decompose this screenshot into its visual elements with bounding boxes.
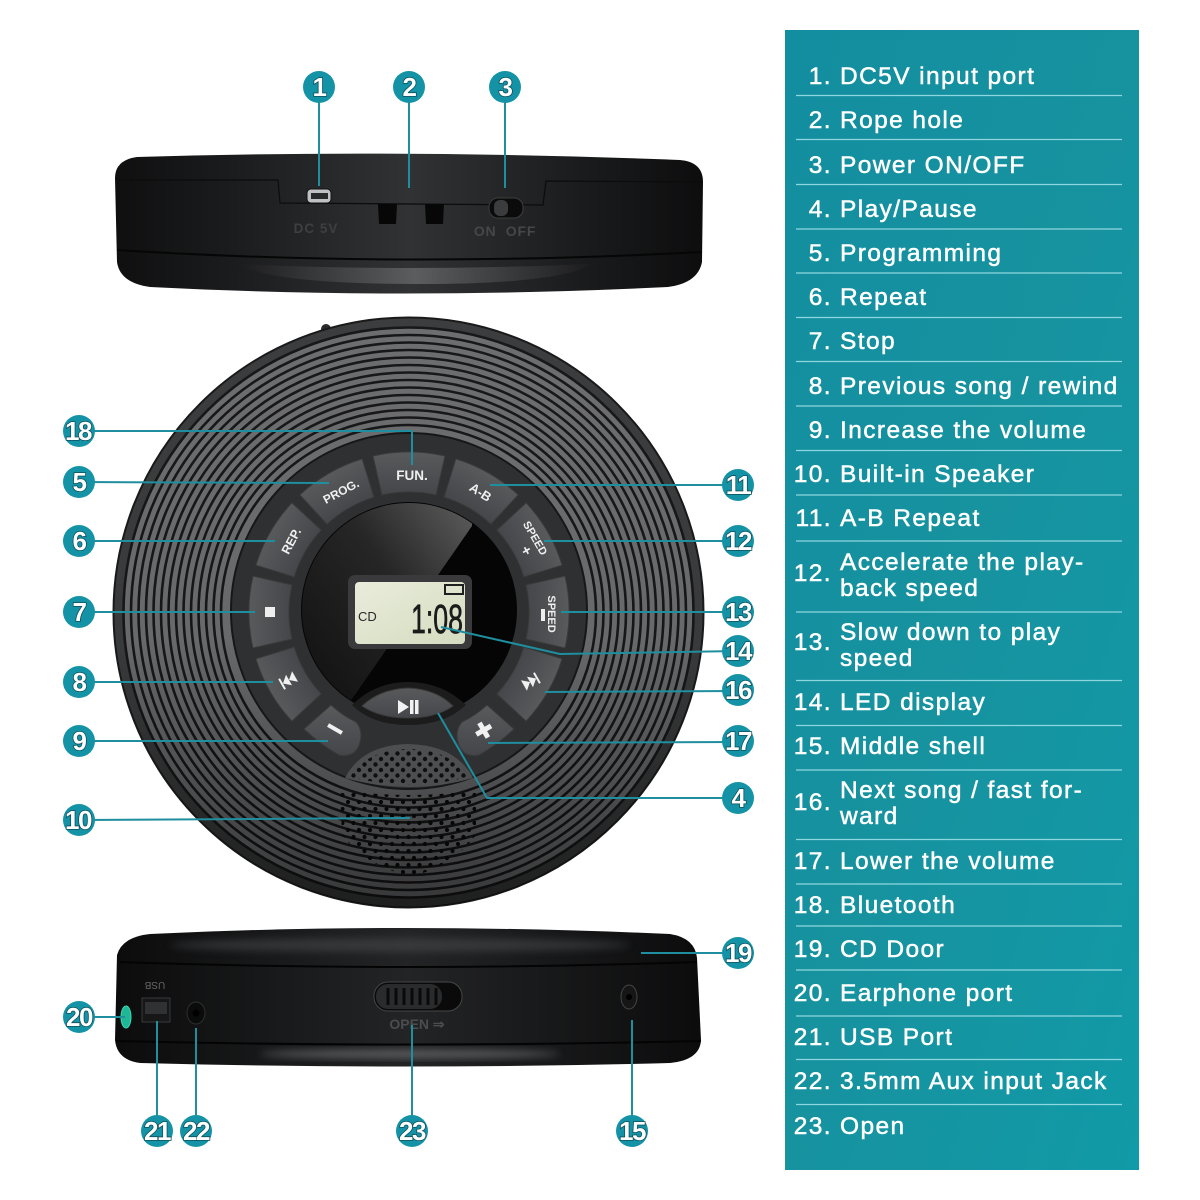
callout 20 bbox=[63, 1001, 125, 1033]
button: REP.: REP. bbox=[279, 526, 304, 557]
callout 18: 18 bbox=[65, 416, 92, 446]
legend item 23: 23. bbox=[794, 1113, 832, 1140]
legend item 14: LED display bbox=[840, 689, 986, 716]
icon: open slider bbox=[374, 982, 462, 1011]
label: ON OFF: ON OFF bbox=[474, 223, 536, 239]
icon: USB port bbox=[142, 979, 170, 1022]
icon: middle shell screw bbox=[621, 985, 637, 1009]
legend item 9: 9. bbox=[809, 417, 832, 444]
button: SPEED - bbox=[526, 576, 569, 648]
legend item 7 bbox=[809, 328, 896, 355]
legend item 13: speed bbox=[840, 645, 914, 672]
callout 18 bbox=[63, 415, 412, 465]
button: FUN.: FUN. bbox=[396, 468, 428, 483]
panel: parts legend bbox=[785, 30, 1139, 1170]
icon: earphone light bbox=[121, 1006, 131, 1028]
speaker grille upper bbox=[345, 744, 473, 787]
disc glare bbox=[302, 503, 472, 700]
button: A-B: A-B bbox=[467, 480, 494, 505]
callout 15 bbox=[616, 1020, 648, 1147]
legend item 23: Open bbox=[840, 1113, 906, 1140]
legend item 11: 11. bbox=[796, 505, 832, 532]
callout 1: 1 bbox=[313, 72, 327, 102]
legend item 7: Stop bbox=[840, 328, 896, 355]
button: play pause bbox=[352, 682, 466, 725]
legend item 4: 4. bbox=[809, 196, 832, 223]
legend item 16 bbox=[794, 777, 1083, 830]
legend item 14: 14. bbox=[794, 689, 832, 716]
button: REP. bbox=[252, 501, 326, 585]
legend item 3: 3. bbox=[809, 152, 832, 179]
legend item 5: 5. bbox=[809, 240, 832, 267]
callout 22: 22 bbox=[183, 1116, 210, 1146]
legend item 12: Accelerate the play- bbox=[840, 549, 1085, 576]
button: previous bbox=[252, 639, 326, 723]
callout 17 bbox=[488, 725, 754, 757]
callout 5 bbox=[63, 466, 329, 498]
callout 5: 5 bbox=[73, 467, 87, 497]
LCD display: CD bbox=[358, 609, 377, 624]
callout 16: 16 bbox=[725, 675, 752, 705]
LCD display bbox=[348, 575, 472, 649]
button: SPEED + bbox=[492, 501, 566, 585]
legend item 8: 8. bbox=[809, 373, 832, 400]
legend item 6: Repeat bbox=[840, 284, 927, 311]
callout 2 bbox=[393, 71, 425, 188]
legend item 12 bbox=[794, 549, 1085, 602]
control ring bbox=[231, 433, 587, 789]
legend item 20: 20. bbox=[794, 980, 832, 1007]
legend item 18: Bluetooth bbox=[840, 892, 956, 919]
button: FUN. bbox=[373, 452, 445, 495]
legend item 1: DC5V input port bbox=[840, 63, 1035, 90]
legend item 19: 19. bbox=[794, 936, 832, 963]
callout 22 bbox=[180, 1028, 212, 1147]
legend item 5: Programming bbox=[840, 240, 1002, 267]
callout 8 bbox=[63, 666, 273, 698]
callout 6 bbox=[63, 525, 275, 557]
button: SPEED -: SPEED bbox=[545, 595, 557, 633]
device: front side view bbox=[115, 928, 701, 1066]
concentric grooves bbox=[124, 328, 694, 898]
callout 19: 19 bbox=[725, 938, 752, 968]
icon: rope holes bbox=[378, 204, 444, 224]
speaker grille lower bbox=[340, 790, 476, 876]
callout 2: 2 bbox=[403, 72, 417, 102]
device: rear side view bbox=[115, 154, 703, 294]
button: stop bbox=[249, 576, 292, 648]
button: A-B bbox=[436, 455, 520, 529]
callout 12 bbox=[544, 525, 754, 557]
callout 7 bbox=[63, 596, 255, 628]
icon: power switch bbox=[489, 198, 523, 218]
legend item 13 bbox=[794, 619, 1061, 672]
callout 13: 13 bbox=[725, 597, 752, 627]
callout 14 bbox=[441, 627, 754, 667]
legend item 9: Increase the volume bbox=[840, 417, 1087, 444]
callout 21 bbox=[141, 1021, 173, 1147]
callout 23 bbox=[396, 1025, 428, 1147]
legend item 13: Slow down to play bbox=[840, 619, 1061, 646]
legend item 1: 1. bbox=[809, 63, 832, 90]
legend item 16: 16. bbox=[794, 789, 832, 816]
button: SPEED +: + bbox=[516, 543, 536, 559]
legend item 13: 13. bbox=[794, 629, 832, 656]
legend item 17: Lower the volume bbox=[840, 848, 1056, 875]
black display disc bbox=[301, 502, 517, 718]
legend item 2: Rope hole bbox=[840, 107, 964, 134]
legend item 16: Next song / fast for- bbox=[840, 777, 1083, 804]
icon: aux jack bbox=[187, 1002, 205, 1024]
label: DC 5V: DC 5V bbox=[294, 221, 338, 236]
callout 13 bbox=[561, 596, 754, 628]
callout 10: 10 bbox=[65, 805, 92, 835]
callout 14: 14 bbox=[725, 636, 753, 666]
callout 9: 9 bbox=[73, 726, 87, 756]
callout 9 bbox=[63, 725, 328, 757]
legend item 22: 22. bbox=[794, 1068, 832, 1095]
legend item 10: Built-in Speaker bbox=[840, 461, 1035, 488]
button: volume plus bbox=[457, 705, 514, 755]
callout 20: 20 bbox=[66, 1002, 93, 1032]
callout 3: 3 bbox=[499, 72, 513, 102]
button: PROG. bbox=[298, 455, 382, 529]
callout 12: 12 bbox=[725, 526, 752, 556]
legend item 23 bbox=[794, 1113, 906, 1140]
legend item 2: 2. bbox=[809, 107, 832, 134]
callout 1 bbox=[303, 71, 335, 186]
legend item 11: A-B Repeat bbox=[840, 505, 981, 532]
legend item 10: 10. bbox=[794, 461, 832, 488]
legend item 8: Previous song / rewind bbox=[840, 373, 1119, 400]
legend item 12: back speed bbox=[840, 575, 979, 602]
button: PROG.: PROG. bbox=[321, 476, 361, 507]
icon: micro USB port bbox=[307, 189, 331, 203]
button: next bbox=[492, 639, 566, 723]
callout 10 bbox=[63, 804, 410, 836]
legend item 19 bbox=[794, 936, 945, 963]
legend item 12: 12. bbox=[794, 560, 832, 587]
callout 8: 8 bbox=[73, 667, 87, 697]
legend item 19: CD Door bbox=[840, 936, 945, 963]
legend item 7: 7. bbox=[809, 328, 832, 355]
label: OPEN: OPEN ⇒ bbox=[389, 1016, 445, 1032]
legend item 18: 18. bbox=[794, 892, 832, 919]
callout 19 bbox=[641, 937, 754, 969]
callout 6: 6 bbox=[73, 526, 87, 556]
LCD display: 1:08 bbox=[411, 596, 463, 642]
legend item 17: 17. bbox=[794, 848, 832, 875]
legend item 20: Earphone port bbox=[840, 980, 1013, 1007]
legend item 22: 3.5mm Aux input Jack bbox=[840, 1068, 1108, 1095]
callout 4 bbox=[438, 713, 754, 814]
button: SPEED +: SPEED bbox=[520, 519, 549, 558]
legend item 16: ward bbox=[839, 803, 899, 830]
legend item 21: USB Port bbox=[840, 1024, 953, 1051]
device: top view disc bbox=[114, 318, 704, 908]
callout 11 bbox=[490, 469, 754, 501]
legend item 15: 15. bbox=[794, 733, 832, 760]
callout 21: 21 bbox=[144, 1116, 171, 1146]
legend item 15: Middle shell bbox=[840, 733, 986, 760]
callout 3 bbox=[489, 71, 521, 188]
legend item 6: 6. bbox=[809, 284, 832, 311]
callout 11: 11 bbox=[726, 470, 751, 500]
callout 7: 7 bbox=[73, 597, 87, 627]
callout 4: 4 bbox=[732, 783, 747, 813]
legend item 4: Play/Pause bbox=[840, 196, 978, 223]
callout 17: 17 bbox=[725, 726, 752, 756]
callout 23: 23 bbox=[399, 1116, 426, 1146]
button: volume minus bbox=[304, 705, 361, 755]
callout 16 bbox=[545, 674, 754, 706]
legend item 21: 21. bbox=[794, 1024, 832, 1051]
callout 15: 15 bbox=[619, 1116, 646, 1146]
legend item 3: Power ON/OFF bbox=[840, 152, 1026, 179]
icon: USB port: USB bbox=[144, 979, 165, 990]
